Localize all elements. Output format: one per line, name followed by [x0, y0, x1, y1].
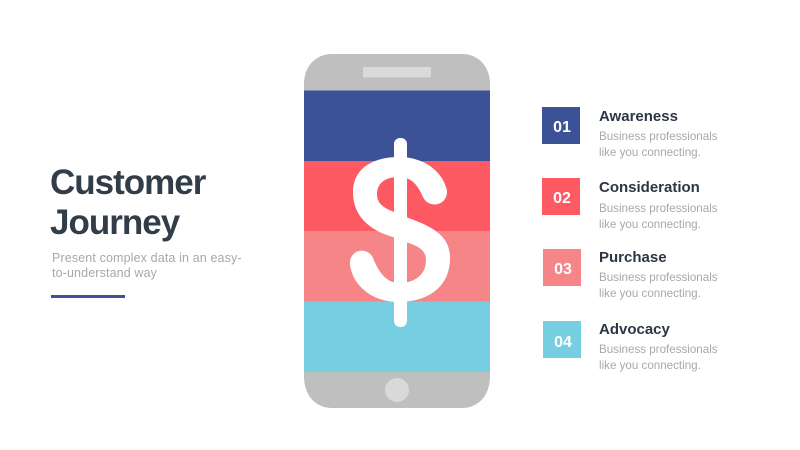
description	[599, 343, 718, 372]
subtitle text: Present complex data in an easy-	[52, 251, 242, 265]
phone body	[304, 54, 490, 408]
band: blue	[304, 90, 490, 161]
heading: Purchase	[599, 249, 667, 266]
number box 04	[543, 321, 581, 358]
speaker	[363, 67, 431, 78]
description	[599, 130, 718, 159]
home button	[385, 378, 409, 402]
number box 01: 01	[553, 119, 571, 136]
description: Business professionals	[599, 130, 718, 143]
description: Business professionals	[599, 271, 718, 284]
number box 04: 04	[554, 334, 572, 351]
item 01: awareness	[542, 107, 718, 159]
title	[50, 163, 206, 242]
heading: Consideration	[599, 179, 700, 196]
description: like you connecting.	[599, 218, 701, 231]
title: Customer	[50, 163, 205, 202]
band: cyan	[304, 302, 490, 372]
title: Journey	[50, 203, 179, 242]
item 03: purchase	[543, 249, 718, 300]
description: like you connecting.	[599, 146, 701, 159]
band: red	[304, 161, 490, 231]
item 04: advocacy	[543, 321, 718, 372]
item 02: consideration	[542, 178, 718, 231]
description: Business professionals	[599, 343, 718, 356]
heading: Advocacy	[599, 321, 670, 338]
number box 02	[542, 178, 580, 215]
description	[599, 271, 718, 300]
title underline	[51, 295, 125, 298]
number box 03	[543, 249, 581, 286]
description	[599, 202, 718, 231]
subtitle text: to-understand way	[52, 266, 157, 280]
number box 01	[542, 107, 580, 144]
band: pink	[304, 231, 490, 302]
subtitle text	[52, 251, 242, 280]
icon: dollar sign	[350, 138, 450, 327]
description: Business professionals	[599, 202, 718, 215]
number box 02: 02	[553, 190, 571, 207]
description: like you connecting.	[599, 359, 701, 372]
description: like you connecting.	[599, 287, 701, 300]
heading: Awareness	[599, 108, 678, 125]
number box 03: 03	[554, 261, 572, 278]
